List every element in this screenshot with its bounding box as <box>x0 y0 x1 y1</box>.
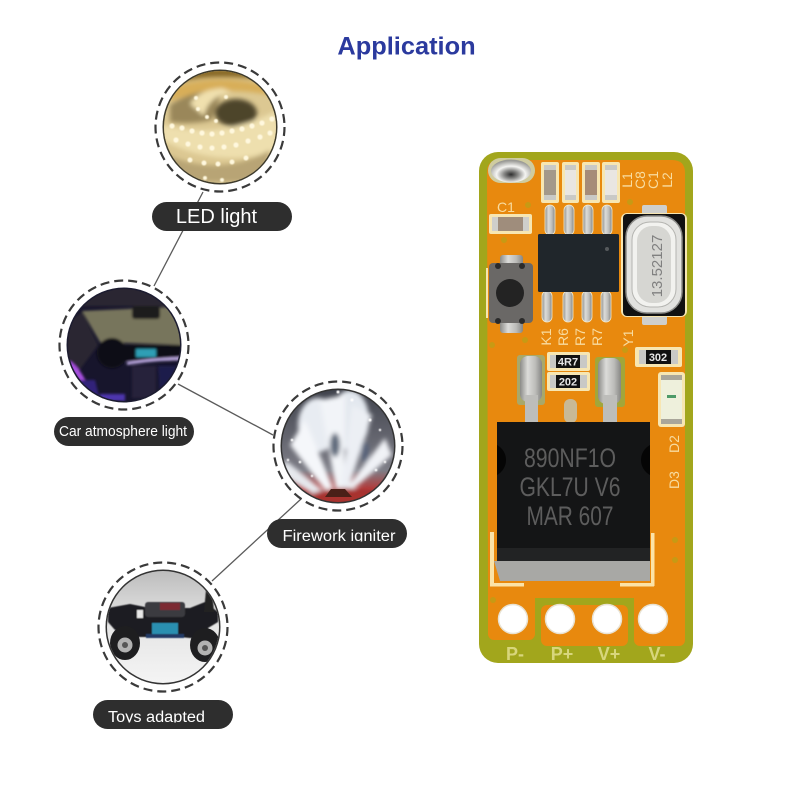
title: Application <box>337 32 476 60</box>
labels: K1 R6 R7 R7 Y1 <box>538 328 636 347</box>
board base <box>479 152 693 663</box>
terminal holes <box>498 604 668 634</box>
terminal labels: V- <box>648 644 666 664</box>
IC pins <box>542 205 612 322</box>
connector lines <box>154 192 301 581</box>
labels: K1 R6 R7 R7 Y1: Y1 <box>620 329 636 347</box>
application: car atmosphere light <box>54 280 194 446</box>
MOSFET leads and pads <box>517 355 625 423</box>
resistor 202: 202 <box>559 376 577 388</box>
label: L1 C8 C1 L2: C1 <box>645 171 661 189</box>
resistor 4R7: 4R7 <box>558 356 578 368</box>
crystal oscillator <box>621 205 687 325</box>
labels: K1 R6 R7 R7 Y1: R7 <box>572 328 588 346</box>
resistor 302 <box>635 347 682 367</box>
label: L1 C8 C1 L2: C8 <box>632 171 648 189</box>
resistor 202 <box>547 372 590 391</box>
photo: car interior <box>68 289 180 401</box>
label: Firework igniter <box>267 519 407 548</box>
labels: K1 R6 R7 R7 Y1: R7 <box>589 328 605 346</box>
terminal labels <box>506 644 666 664</box>
MOSFET markings: 890NF1O <box>524 443 616 473</box>
photo: toy RC car <box>107 571 219 683</box>
label: Car atmosphere light: Car atmosphere light <box>59 424 187 440</box>
top capacitors <box>541 162 620 203</box>
MOSFET markings <box>520 443 620 531</box>
push button <box>486 255 533 333</box>
resistor 4R7 <box>547 352 590 371</box>
label: L1 C8 C1 L2: L2 <box>659 172 675 188</box>
label: Toys adapted: Toys adapted <box>108 709 205 726</box>
photo: LED strip coil <box>164 71 276 183</box>
label: LED light: LED light <box>176 206 258 228</box>
MOSFET side notches <box>497 445 650 475</box>
label: C1: C1 <box>497 199 515 215</box>
labels: D2 D3: D2 <box>666 435 682 453</box>
application: LED light <box>152 62 292 231</box>
label: Car atmosphere light <box>54 417 194 446</box>
label: L1 C8 C1 L2: L1 <box>619 172 635 188</box>
terminal labels: P+ <box>551 644 573 664</box>
MOSFET <box>490 422 654 586</box>
toy wheels <box>110 626 220 662</box>
MOSFET markings: MAR 607 <box>526 501 614 531</box>
copper vias <box>489 199 678 603</box>
capacitor C1 <box>489 214 532 234</box>
copper area <box>487 160 685 646</box>
photo: fireworks fountain <box>282 390 394 502</box>
IC chip <box>538 234 619 292</box>
terminal labels: P- <box>506 644 524 664</box>
application: firework igniter <box>267 382 407 548</box>
terminal labels: V+ <box>598 644 620 664</box>
application: toys adapted <box>93 562 233 729</box>
LED component <box>658 372 685 427</box>
mounting hole <box>488 158 535 183</box>
resistor 302: 302 <box>649 352 667 364</box>
circuit board <box>479 152 693 664</box>
label: LED light <box>152 202 292 231</box>
label: Firework igniter: Firework igniter <box>282 528 396 545</box>
labels: D2 D3 <box>666 435 682 489</box>
MOSFET markings: GKL7U V6 <box>520 472 620 502</box>
crystal oscillator: 13.52127 <box>649 235 666 297</box>
labels: D2 D3: D3 <box>666 471 682 489</box>
labels: K1 R6 R7 R7 Y1: R6 <box>555 328 571 346</box>
labels: K1 R6 R7 R7 Y1: K1 <box>538 328 554 346</box>
label: Toys adapted <box>93 700 233 729</box>
label: L1 C8 C1 L2 <box>619 171 675 189</box>
